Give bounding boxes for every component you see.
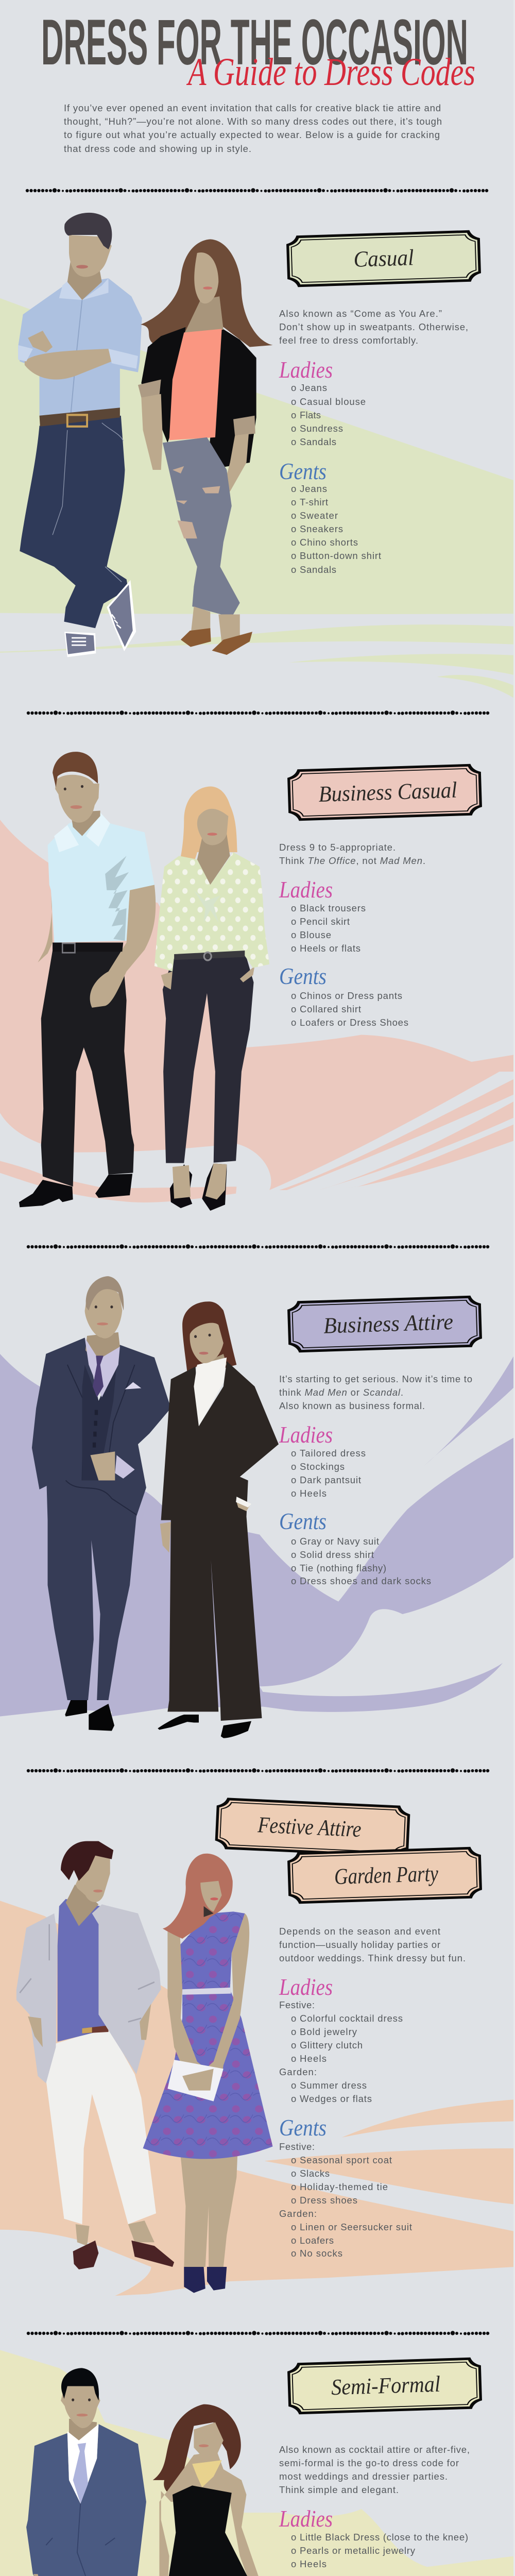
- list: gents casual: o: [291, 564, 296, 575]
- list: ladies semi-formal: Little Black Dress (close to the knee): [300, 2532, 468, 2543]
- list: ladies business attire: o: [291, 1461, 296, 1472]
- heading: gents: Gents: [279, 458, 327, 484]
- face: [194, 2422, 224, 2459]
- figure: business attire woman: [158, 1301, 279, 1738]
- list: gents festive: o: [291, 2195, 296, 2206]
- list: ladies business casual: o: [291, 929, 296, 940]
- list: gents business attire: o: [291, 1563, 296, 1573]
- text: festive description: [279, 1926, 466, 1963]
- hair: [141, 239, 273, 347]
- list: ladies semi-formal: [291, 2532, 468, 2569]
- text: semi-formal description: Also known as cocktail attire or after-five,: [279, 2444, 470, 2455]
- list: gents casual: Sneakers: [300, 523, 343, 534]
- list: ladies festive: o: [291, 2026, 296, 2037]
- shirt: [48, 812, 154, 943]
- list: gents casual: o: [291, 550, 296, 561]
- list: gents festive: Slacks: [300, 2168, 330, 2179]
- list: ladies festive: Bold jewelry: [300, 2026, 357, 2037]
- dress: [159, 2485, 271, 2576]
- list: ladies casual: [291, 382, 366, 447]
- figure: casual man: [18, 213, 142, 657]
- list: ladies festive: o: [291, 2040, 296, 2050]
- figure: semi-formal man: [26, 2368, 146, 2576]
- list: gents business casual: Loafers or Dress Shoes: [300, 1017, 408, 1028]
- face: [61, 2386, 100, 2428]
- list: gents casual: o: [291, 483, 296, 494]
- dress: [143, 1911, 273, 2159]
- arms: [90, 885, 156, 1008]
- neck and face: [67, 260, 102, 300]
- list: ladies business attire: [291, 1448, 366, 1499]
- list: ladies business attire: o: [291, 1488, 296, 1499]
- hair: [153, 2404, 241, 2502]
- list: gents business attire: o: [291, 1536, 296, 1547]
- clutch: [167, 2060, 224, 2102]
- list: ladies festive: Wedges or flats: [300, 2093, 372, 2104]
- boots: [19, 1174, 132, 1207]
- list: ladies business casual: Pencil skirt: [300, 916, 350, 927]
- list: ladies festive: [279, 1999, 403, 2104]
- figure: business casual man: [19, 752, 156, 1207]
- list: gents business attire: Solid dress shirt: [300, 1549, 374, 1560]
- list: gents festive: Dress shoes: [300, 2195, 357, 2206]
- text: casual description: [279, 308, 468, 346]
- suit: [161, 1361, 279, 1721]
- list: gents business casual: o: [291, 990, 296, 1001]
- hair: [61, 2368, 99, 2401]
- background shape: festive peach: [0, 1901, 515, 2296]
- hair: [182, 1301, 236, 1374]
- list: gents festive: Festive:: [279, 2141, 315, 2152]
- list: gents business attire: o: [291, 1575, 296, 1586]
- list: gents casual: o: [291, 510, 296, 521]
- list: ladies casual: o: [291, 396, 296, 407]
- face: [194, 252, 218, 303]
- ankles: [76, 2221, 154, 2246]
- trousers: [41, 951, 134, 1187]
- list: gents festive: o: [291, 2181, 296, 2192]
- shoes: [184, 2267, 227, 2293]
- heading: gents: Gents: [279, 1508, 327, 1534]
- neck: [71, 811, 100, 836]
- banner: festive attire: Festive Attire: [257, 1812, 362, 1842]
- list: ladies casual: o: [291, 436, 296, 447]
- text: business attire description: think Mad Men or Scandal.: [279, 1387, 403, 1398]
- loafers: [73, 2241, 174, 2269]
- list: gents festive: Linen or Seersucker suit: [300, 2222, 412, 2232]
- list: ladies business casual: Heels or flats: [300, 943, 360, 954]
- heading: ladies: Ladies: [279, 357, 333, 383]
- list: gents festive: o: [291, 2155, 296, 2165]
- list: ladies business casual: o: [291, 903, 296, 913]
- figure: festive woman: [143, 1854, 273, 2293]
- hair: [61, 1841, 113, 1881]
- list: ladies business casual: Blouse: [300, 929, 331, 940]
- list: ladies festive: o: [291, 2013, 296, 2024]
- text: business casual description: Dress 9 to 5-appropriate.: [279, 842, 396, 853]
- heading: gents: Gents: [279, 963, 327, 989]
- figure: business attire man: [32, 1276, 171, 1731]
- list: ladies business casual: o: [291, 916, 296, 927]
- list: ladies festive: o: [291, 2080, 296, 2091]
- hands: [160, 1502, 250, 1553]
- list: ladies casual: o: [291, 423, 296, 434]
- face: [85, 1288, 122, 1338]
- list: gents business attire: [291, 1536, 431, 1586]
- list: ladies semi-formal: Pearls or metallic jewelry: [300, 2545, 416, 2556]
- list: ladies semi-formal: o: [291, 2558, 296, 2569]
- list: ladies festive: Glittery clutch: [300, 2040, 363, 2050]
- neck: [200, 1354, 227, 1386]
- shirt: [194, 1358, 227, 1426]
- list: gents casual: Sweater: [300, 510, 338, 521]
- text: casual description: Also known as “Come as You Are.”: [279, 308, 442, 319]
- list: ladies business attire: Tailored dress: [300, 1448, 366, 1459]
- pocket square: [125, 1382, 141, 1389]
- shirt: [67, 2424, 98, 2503]
- list: gents festive: o: [291, 2168, 296, 2179]
- top: [169, 329, 222, 440]
- waist trim: [182, 1988, 231, 1995]
- list: ladies casual: Flats: [300, 410, 321, 420]
- list: ladies casual: o: [291, 382, 296, 393]
- list: ladies festive: o: [291, 2053, 296, 2064]
- vest: [82, 1365, 116, 1480]
- list: ladies festive: Garden:: [279, 2066, 317, 2077]
- list: ladies business casual: Black trousers: [300, 903, 366, 913]
- text: festive description: outdoor weddings. Think dressy but fun.: [279, 1953, 466, 1963]
- intro text: that dress code and showing up in style.: [64, 143, 251, 154]
- shirt: [85, 1337, 120, 1397]
- banner: business casual: [287, 764, 482, 821]
- necklace: [192, 2460, 222, 2487]
- list: gents festive: Loafers: [300, 2235, 334, 2246]
- heading: ladies: Ladies: [279, 2505, 333, 2532]
- body: [159, 2451, 273, 2576]
- list: gents festive: Seasonal sport coat: [300, 2155, 392, 2165]
- white trousers: [46, 2027, 156, 2224]
- list: gents business casual: Collared shirt: [300, 1004, 361, 1014]
- banner: business attire: [287, 1295, 482, 1353]
- arms: [167, 1931, 210, 2094]
- background shape: business casual pink: [0, 820, 515, 1202]
- list: gents business casual: o: [291, 1004, 296, 1014]
- text: festive description: function—usually holiday parties or: [279, 1939, 440, 1950]
- text: semi-formal description: [279, 2444, 470, 2495]
- text: semi-formal description: semi-formal is the go-to dress code for: [279, 2458, 459, 2468]
- blouse: [154, 852, 269, 972]
- face: [76, 1852, 110, 1902]
- hair: [86, 1276, 124, 1311]
- banner: garden party: Garden Party: [334, 1861, 439, 1889]
- heading: ladies: Ladies: [279, 1421, 333, 1448]
- list: gents casual: Chino shorts: [300, 537, 358, 548]
- tie: [93, 1355, 104, 1397]
- list: gents festive: o: [291, 2222, 296, 2232]
- background shape: semi-formal yellow: [0, 2350, 515, 2576]
- list: gents festive: No socks: [300, 2248, 342, 2259]
- text: festive description: Depends on the season and event: [279, 1926, 440, 1937]
- list: gents business attire: o: [291, 1549, 296, 1560]
- list: gents festive: o: [291, 2248, 296, 2259]
- background shape: casual green: [0, 298, 515, 699]
- hands: [28, 2004, 151, 2047]
- hair: [53, 752, 98, 787]
- list: ladies business casual: [291, 903, 366, 954]
- heading: gents: Gents: [279, 2114, 327, 2141]
- banner: semi-formal: [287, 2357, 482, 2415]
- figure: festive man: [16, 1841, 174, 2269]
- text: business attire description: Also known as business formal.: [279, 1400, 425, 1411]
- shoes: [65, 1700, 114, 1731]
- list: gents casual: Jeans: [300, 483, 327, 494]
- shoes: [158, 1715, 251, 1738]
- list: ladies festive: Colorful cocktail dress: [300, 2013, 403, 2024]
- banner: business casual: Business Casual: [318, 777, 457, 807]
- list: ladies casual: Sundress: [300, 423, 343, 434]
- hand: [33, 2574, 135, 2576]
- feet and sandals: [191, 606, 240, 643]
- banner: casual: Casual: [353, 245, 414, 272]
- list: ladies casual: Casual blouse: [300, 396, 366, 407]
- list: ladies semi-formal: Heels: [300, 2558, 327, 2569]
- belt: [53, 943, 123, 952]
- intro text: If you’ve ever opened an event invitation that calls for creative black tie attire and: [64, 103, 441, 113]
- legs: [181, 2154, 237, 2267]
- banner: garden party: [287, 1846, 482, 1904]
- list: gents festive: Holiday-themed tie: [300, 2181, 388, 2192]
- list: gents casual: T-shirt: [300, 497, 328, 507]
- list: gents casual: [291, 483, 381, 575]
- figure: business casual woman: [154, 787, 269, 1211]
- list: ladies festive: Festive:: [279, 1999, 315, 2010]
- text: business casual description: [279, 842, 425, 866]
- list: gents casual: Sandals: [300, 564, 336, 575]
- list: ladies business attire: o: [291, 1448, 296, 1459]
- crossed arms: [25, 349, 112, 380]
- list: ladies casual: Sandals: [300, 436, 336, 447]
- neck: [184, 296, 224, 334]
- text: business attire description: It’s starting to get serious. Now it’s time to: [279, 1374, 472, 1384]
- face: [197, 809, 228, 845]
- jacket: [141, 327, 256, 470]
- belt: [174, 951, 245, 960]
- blazer: [16, 1913, 58, 2083]
- list: ladies business attire: o: [291, 1475, 296, 1485]
- suit: [26, 2424, 146, 2576]
- text: business attire description: [279, 1374, 472, 1411]
- list: gents casual: Button-down shirt: [300, 550, 381, 561]
- banner: semi-formal: Semi-Formal: [331, 2371, 441, 2400]
- intro text: to figure out what you’re actually expected to wear. Below is a guide for cracking: [64, 129, 440, 140]
- hand and cuff: [115, 1455, 135, 1479]
- sneakers: [64, 580, 136, 657]
- polo: [58, 1899, 109, 2042]
- face: [55, 775, 99, 823]
- text: casual description: feel free to dress comfortably.: [279, 335, 418, 346]
- heels: [170, 1163, 227, 1211]
- list: ladies festive: o: [291, 2093, 296, 2104]
- neck: [66, 1885, 98, 1926]
- text: semi-formal description: Think simple and elegant.: [279, 2484, 399, 2495]
- belt: [40, 408, 120, 427]
- neck: [69, 2419, 97, 2448]
- list: gents business attire: Dress shoes and dark socks: [300, 1575, 431, 1586]
- hands: [161, 966, 254, 990]
- list: ladies business attire: Dark pantsuit: [300, 1475, 361, 1485]
- intro text: thought, “Huh?”—you’re not alone. With so many dress codes out there, it’s tough: [64, 116, 442, 127]
- neck: [85, 1332, 120, 1365]
- list: ladies semi-formal: o: [291, 2545, 296, 2556]
- list: gents festive: o: [291, 2235, 296, 2246]
- heading: ladies: Ladies: [279, 1974, 333, 2000]
- face: [190, 1323, 224, 1363]
- hair: [173, 787, 237, 881]
- trousers: [163, 952, 254, 1163]
- shirt: [18, 278, 142, 416]
- list: gents festive: Garden:: [279, 2208, 317, 2219]
- neck: [197, 834, 230, 885]
- neck: [204, 1906, 214, 1917]
- list: gents casual: o: [291, 497, 296, 507]
- list: ladies casual: o: [291, 410, 296, 420]
- banner: festive attire: [215, 1798, 410, 1857]
- text: semi-formal description: most weddings and dressier parties.: [279, 2471, 448, 2482]
- list: ladies business attire: Heels: [300, 1488, 327, 1499]
- tie: [73, 2443, 88, 2503]
- list: gents festive: [279, 2141, 412, 2259]
- arms: [141, 394, 249, 492]
- figure: casual woman: [138, 239, 273, 655]
- intro text: [64, 103, 442, 154]
- banner: business attire: Business Attire: [323, 1309, 454, 1338]
- text: casual description: Don’t show up in sweatpants. Otherwise,: [279, 321, 468, 332]
- hair: [64, 213, 112, 249]
- list: ladies business attire: Stockings: [300, 1461, 345, 1472]
- hands: [182, 2069, 214, 2091]
- jeans: [163, 437, 240, 617]
- heading: ladies: Ladies: [279, 876, 333, 903]
- list: gents casual: o: [291, 523, 296, 534]
- hair: [163, 1854, 233, 1939]
- list: gents business casual: o: [291, 1017, 296, 1028]
- suit: [32, 1337, 171, 1700]
- list: gents casual: o: [291, 537, 296, 548]
- face: [200, 1881, 222, 1911]
- list: ladies business casual: o: [291, 943, 296, 954]
- list: gents business casual: Chinos or Dress pants: [300, 990, 402, 1001]
- list: gents business attire: Tie (nothing flashy): [300, 1563, 386, 1573]
- list: ladies festive: Summer dress: [300, 2080, 367, 2091]
- jeans: [20, 416, 128, 628]
- text: business casual description: Think The Office, not Mad Men.: [279, 855, 425, 866]
- banner: casual: [286, 230, 481, 287]
- figure: semi-formal woman: [153, 2404, 273, 2576]
- list: gents business attire: Gray or Navy suit: [300, 1536, 379, 1547]
- cuffs: [138, 380, 255, 435]
- list: ladies semi-formal: o: [291, 2532, 296, 2543]
- list: ladies casual: Jeans: [300, 382, 327, 393]
- list: gents business casual: [291, 990, 408, 1028]
- background shape: business attire lavender: [0, 1354, 515, 1717]
- list: ladies festive: Heels: [300, 2053, 327, 2064]
